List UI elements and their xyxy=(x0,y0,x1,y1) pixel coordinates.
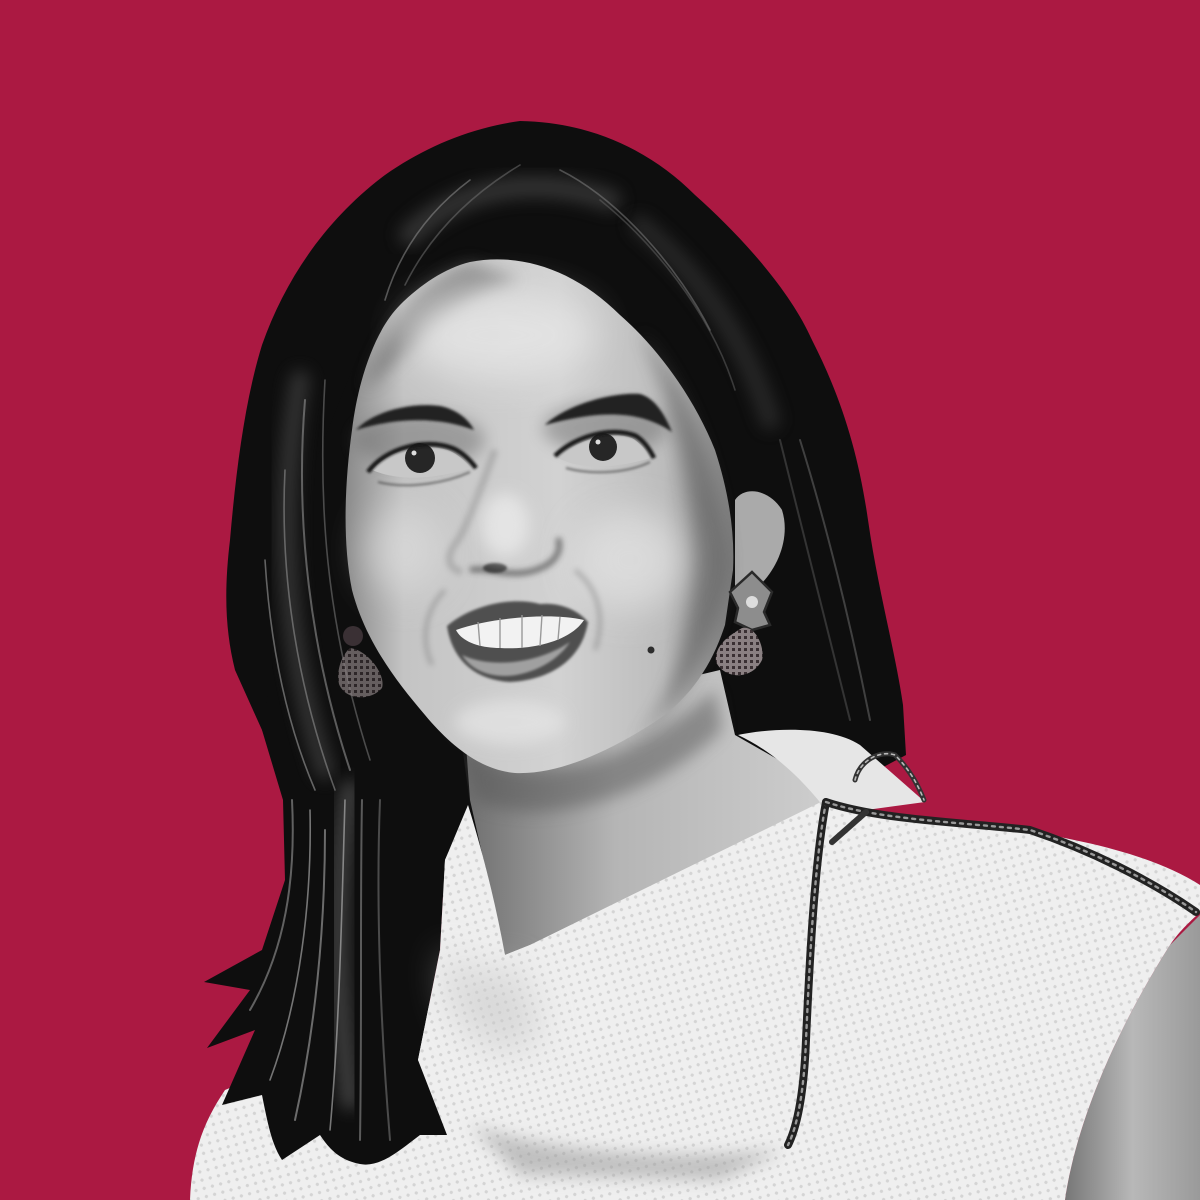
mouth xyxy=(447,601,588,682)
zipper xyxy=(788,754,1196,1145)
earring right xyxy=(716,572,772,675)
nasolabial creases xyxy=(426,570,600,665)
hair front lock with strands xyxy=(204,165,870,1165)
hair back mass xyxy=(226,121,906,900)
nose xyxy=(449,450,559,573)
face xyxy=(346,259,785,773)
left eye xyxy=(368,443,476,485)
hair strands xyxy=(250,165,870,1140)
right eye xyxy=(555,432,654,472)
back collar xyxy=(738,730,925,815)
fold shadows xyxy=(444,950,539,1051)
earring left xyxy=(338,626,383,697)
white top xyxy=(190,730,1200,1200)
arm skin xyxy=(1065,915,1200,1200)
ear xyxy=(735,491,785,590)
body xyxy=(190,800,1200,1200)
right eyebrow xyxy=(545,394,672,432)
neck fold xyxy=(418,802,826,1149)
face shading xyxy=(355,262,728,745)
left eyebrow xyxy=(356,405,474,430)
mole xyxy=(648,646,654,654)
neck xyxy=(465,670,840,965)
front collar and zipper xyxy=(418,754,1196,1180)
